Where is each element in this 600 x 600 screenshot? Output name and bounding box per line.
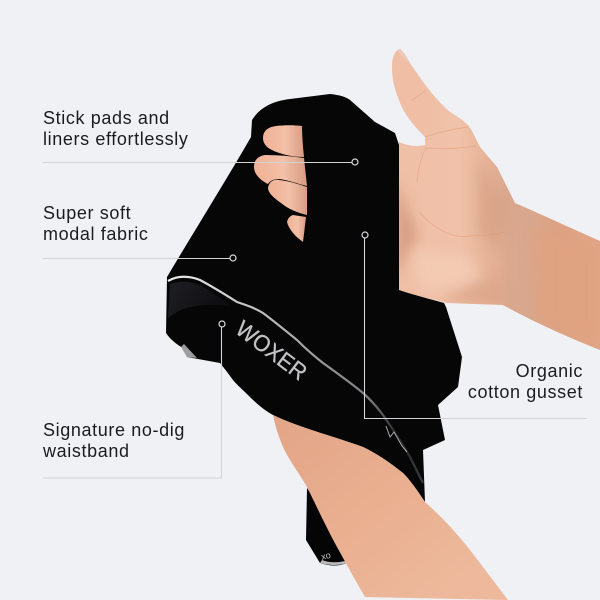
garment: black folded underwear [166,94,462,502]
heading: gusset: Organic [516,361,583,381]
callout: modal fabric [43,203,236,261]
leader line: stick pads [43,162,352,164]
leader line: modal fabric [43,258,230,260]
heading: stick pads: Stick pads and [43,108,170,128]
palm creases [412,90,505,237]
callout: modal fabric: modal fabric [43,224,148,244]
small logo on lower hanging piece: xo [320,550,332,562]
callout: stick pads: liners effortlessly [43,129,188,149]
small logo on lower hanging piece [320,550,347,565]
garment: lower hanging piece [306,488,347,566]
callout: stick pads [43,108,358,165]
callout: waistband [42,321,225,478]
waistband reflective stripe [168,277,423,483]
palm, thumb and wrist [392,49,600,350]
hand and forearm holding the garment [392,49,600,350]
finger 1 [263,125,304,157]
leader line: gusset [364,238,587,418]
grey edge of waistband, underside [181,344,197,358]
finger 2 [254,155,307,186]
fingers gripping the garment [254,125,307,242]
WOXER logo on waistband: WOXER [231,315,312,385]
leader line: waistband [43,327,222,478]
callout: gusset: cotton gusset [468,382,583,402]
thumbnail [398,49,411,65]
heading: waistband: Signature no-dig [43,420,185,440]
marker: stick pads [352,159,358,165]
finger 3 [268,180,307,215]
heading: modal fabric: Super soft [43,203,131,223]
forearm below the garment [273,415,508,600]
partial logo on waistband [386,426,407,452]
marker: waistband [219,321,225,327]
garment: waistband highlight [168,282,232,318]
palm shading [399,173,550,328]
callout: waistband: waistband [42,441,130,461]
finger 4 [287,215,306,242]
marker: modal fabric [230,255,236,261]
marker: gusset [362,232,368,238]
callout: gusset [362,232,587,418]
